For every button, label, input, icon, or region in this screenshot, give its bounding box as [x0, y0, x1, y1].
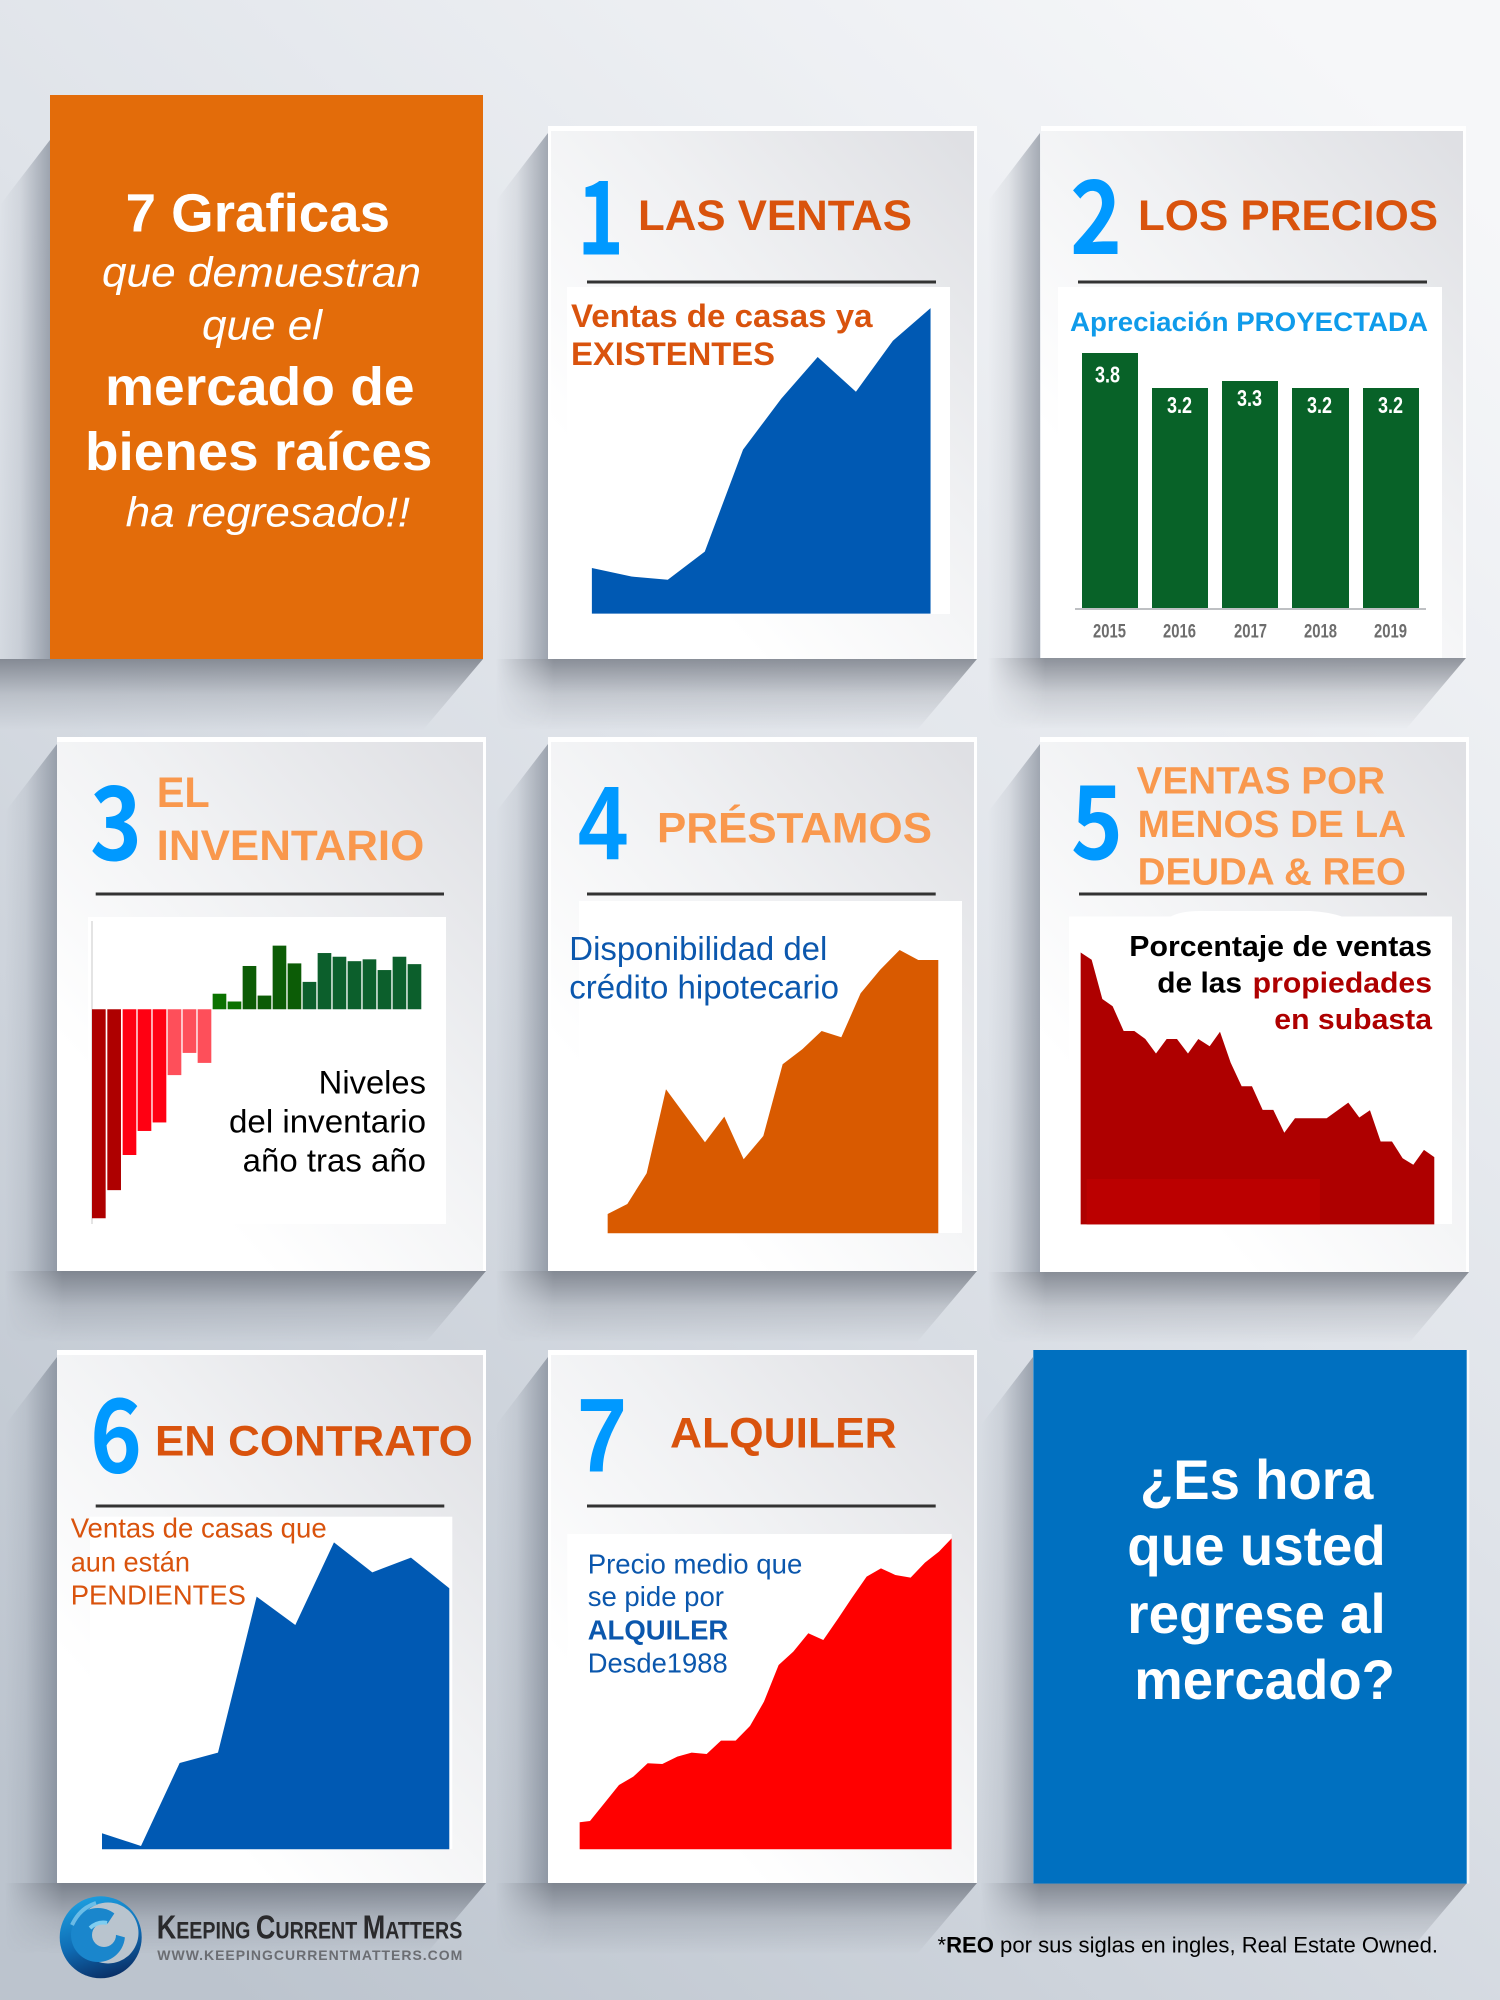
- chart: mortgage credit availability: crédito hipotecario: [569, 968, 839, 1005]
- number 1: 1: [577, 138, 624, 285]
- question text: que usted: [1127, 1514, 1386, 1577]
- panel: 3 el inventario: [5, 737, 486, 1342]
- chart: mortgage credit availability: Disponibilidad del: [569, 930, 827, 967]
- chart: inventory levels: [88, 917, 446, 1224]
- number 3: 3: [90, 743, 142, 890]
- heading: las ventas: LAS VENTAS: [638, 192, 912, 240]
- chart: median asking rent: [567, 1534, 952, 1849]
- panel: title block: [0, 95, 483, 730]
- panel: 7 alquiler: [496, 1350, 977, 1954]
- question text: mercado?: [1134, 1648, 1395, 1711]
- company name: KEEPING CURRENT MATTERS: [157, 1908, 462, 1945]
- heading: ventas por menos de la deuda y reo: VENTAS POR: [1137, 761, 1385, 803]
- chart: projected appreciation: 3.2: [1307, 392, 1332, 418]
- question text: ¿Es hora: [1140, 1448, 1374, 1511]
- chart: existing home sales: EXISTENTES: [571, 336, 775, 372]
- chart: median asking rent: Precio medio que: [588, 1548, 802, 1579]
- number 4: 4: [578, 765, 627, 882]
- chart: pending home sales: Ventas de casas que: [71, 1512, 327, 1543]
- chart: distressed sales percentage: Porcentaje de ventas: [1129, 931, 1432, 963]
- chart: inventory levels: año tras año: [243, 1142, 426, 1178]
- panel: 5 ventas por menos de la deuda: [988, 737, 1469, 1343]
- heading: el inventario: INVENTARIO: [157, 822, 424, 870]
- heading: ventas por menos de la deuda y reo: DEUDA & REO: [1138, 852, 1406, 894]
- question text: [1127, 1448, 1395, 1711]
- footnote: *REO por sus siglas en ingles, Real Estate Owned.: [938, 1933, 1438, 1958]
- title text: 7 Graficas: [126, 183, 390, 243]
- title text: [85, 183, 432, 535]
- heading: el inventario: EL: [157, 769, 210, 817]
- chart: median asking rent: se pide por: [588, 1581, 724, 1612]
- chart: projected appreciation: 3.2: [1378, 392, 1403, 418]
- chart: projected appreciation: 3.8: [1095, 362, 1120, 388]
- chart: distressed sales percentage: [1069, 911, 1452, 1224]
- panel: 2 los precios: [988, 126, 1466, 729]
- chart: projected appreciation: 2018: [1304, 622, 1337, 642]
- heading: el inventario: [157, 769, 424, 870]
- title text: bienes raíces: [85, 422, 432, 482]
- chart: existing home sales: Ventas de casas ya: [571, 298, 873, 334]
- heading: ventas por menos de la deuda y reo: [1137, 761, 1406, 894]
- chart: inventory levels: del inventario: [229, 1103, 426, 1139]
- heading: alquiler: ALQUILER: [670, 1409, 897, 1457]
- chart: median asking rent: ALQUILER: [588, 1614, 728, 1645]
- chart: projected appreciation: [1058, 287, 1442, 658]
- chart: pending home sales: PENDIENTES: [71, 1579, 246, 1610]
- heading: prestamos: PRÉSTAMOS: [657, 804, 932, 852]
- icon: blue spiral: [60, 1896, 142, 1978]
- chart: median asking rent: Desde1988: [588, 1648, 728, 1679]
- chart: distressed sales percentage: propiedades: [1253, 967, 1432, 999]
- number 2: 2: [1070, 137, 1122, 284]
- company url: WWW.KEEPINGCURRENTMATTERS.COM: [157, 1947, 462, 1963]
- panel: 6 en contrato: [5, 1350, 486, 1954]
- heading: en contrato: EN CONTRATO: [155, 1418, 473, 1466]
- chart: mortgage credit availability: [569, 901, 962, 1233]
- panel: 1 las ventas: [496, 126, 977, 730]
- chart: distressed sales percentage: en subasta: [1274, 1004, 1433, 1036]
- chart: projected appreciation: 2016: [1163, 622, 1196, 642]
- chart: pending home sales: [71, 1512, 452, 1849]
- chart: projected appreciation: 3.3: [1237, 385, 1262, 411]
- number 5: 5: [1071, 742, 1123, 889]
- logo: keeping current matters: [60, 1896, 462, 1978]
- chart: distressed sales percentage: de las: [1157, 967, 1242, 999]
- question text: regrese al: [1127, 1582, 1386, 1645]
- title text: mercado de: [105, 357, 415, 417]
- chart: projected appreciation: Apreciación PROYECTADA: [1070, 307, 1428, 337]
- heading: los precios: LOS PRECIOS: [1138, 192, 1438, 240]
- chart: projected appreciation: 3.2: [1167, 392, 1192, 418]
- chart: projected appreciation: 2017: [1234, 622, 1267, 642]
- title text: ha regresado!!: [126, 488, 410, 535]
- title text: que el: [202, 302, 324, 348]
- number 7: 7: [577, 1378, 627, 1495]
- panel: call to action: [981, 1350, 1469, 1954]
- chart: projected appreciation: 2015: [1093, 622, 1126, 642]
- chart: inventory levels: Niveles: [319, 1065, 426, 1101]
- heading: ventas por menos de la deuda y reo: MENOS DE LA: [1138, 804, 1406, 846]
- panel: 4 prestamos: [496, 737, 977, 1342]
- title text: que demuestran: [102, 248, 421, 295]
- number 6: 6: [90, 1356, 142, 1503]
- chart: projected appreciation: 2019: [1374, 622, 1407, 642]
- chart: existing home sales: [567, 287, 950, 614]
- chart: pending home sales: aun están: [71, 1546, 190, 1577]
